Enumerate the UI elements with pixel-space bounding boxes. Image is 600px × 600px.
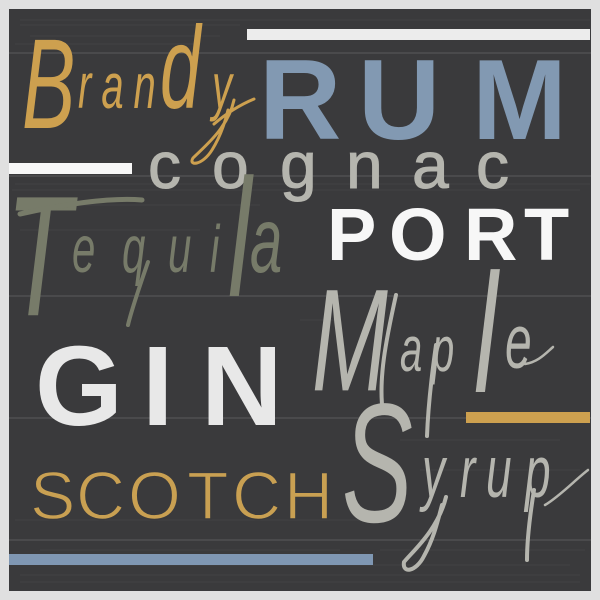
word: Syrup: u — [486, 431, 512, 514]
word: Brandy: d — [160, 2, 203, 133]
word: Tequila: l — [228, 144, 254, 332]
word: Tequila: i — [210, 211, 220, 286]
word: Tequila: e — [72, 211, 97, 286]
word: Maple: M — [312, 258, 388, 422]
word: Maple: p — [431, 315, 454, 386]
bar: top white — [247, 29, 590, 40]
bar: left white — [9, 163, 132, 174]
word: Maple: a — [400, 315, 422, 386]
word: Brandy: y — [209, 52, 234, 122]
word: Brandy: B — [22, 12, 75, 156]
word: Brandy — [22, 2, 254, 163]
word: Maple: l — [474, 238, 500, 428]
word: Syrup: y — [419, 431, 447, 514]
word: Brandy: ran — [78, 52, 166, 122]
word: Tequila — [6, 144, 282, 352]
bar: right gold — [466, 412, 590, 423]
word: Maple — [312, 238, 553, 436]
word: Tequila: a — [250, 189, 282, 292]
word: Tequila: u — [168, 211, 191, 286]
word: cognac: cognac — [148, 128, 509, 202]
word: Maple: e — [505, 298, 532, 385]
word: Syrup — [342, 368, 588, 570]
word: Tequila: q — [122, 211, 145, 286]
word: Syrup: r — [460, 431, 477, 514]
word: RUM: RUM — [259, 37, 567, 164]
word: GIN: GIN — [35, 323, 283, 449]
word: Tequila: T — [6, 162, 78, 352]
word: Syrup: p — [524, 431, 551, 514]
word: PORT: PORT — [327, 193, 569, 276]
word: Syrup: S — [342, 368, 413, 558]
word: SCOTCH: SCOTCH — [30, 458, 333, 534]
bar: bottom blue — [9, 554, 373, 565]
